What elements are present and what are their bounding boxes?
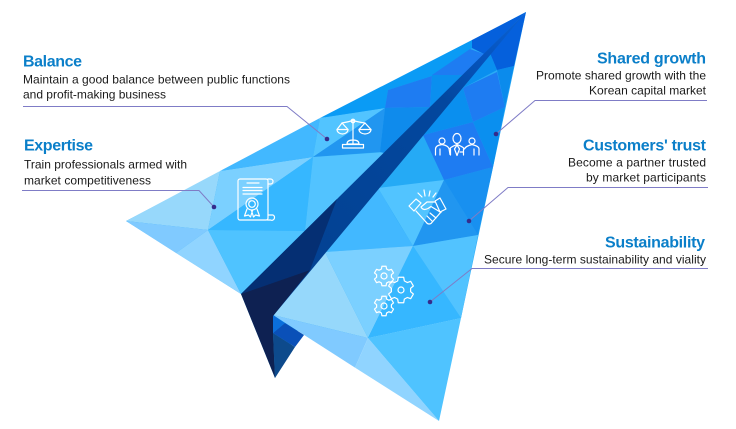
lower wing facets — [273, 235, 478, 421]
callout: Balance: Balance — [23, 53, 82, 70]
tail facets — [273, 315, 304, 378]
callout: Shared growth — [494, 50, 707, 136]
callout: Expertise: Train professionals armed with — [24, 157, 187, 171]
callout: Expertise — [22, 137, 216, 209]
icon: certificate scroll — [238, 179, 275, 220]
callout: Balance: and profit-making business — [23, 87, 166, 101]
callout: Balance: Maintain a good balance between public functions — [23, 72, 290, 86]
callout: Customers' trust: by market participants — [586, 170, 706, 184]
callout: Balance — [23, 53, 329, 141]
icon: gears — [371, 263, 418, 319]
callout: Shared growth: Shared growth — [597, 50, 706, 67]
icon: group of people — [436, 134, 479, 156]
callout: Sustainability: Sustainability — [605, 234, 705, 251]
callout: Sustainability: Secure long-term sustainability and viality — [484, 252, 706, 266]
callout: Shared growth: Promote shared growth with the — [536, 68, 706, 82]
upper left wing facets — [126, 12, 526, 294]
callout: Shared growth: Korean capital market — [589, 83, 707, 97]
callout: Expertise: Expertise — [24, 137, 93, 154]
paper plane — [126, 12, 526, 421]
icon: handshake — [409, 190, 446, 224]
callout: Customers' trust: Become a partner trusted — [568, 155, 706, 169]
icon: balance scale — [337, 119, 371, 148]
callout: Expertise: market competitiveness — [24, 173, 151, 187]
callout: Customers' trust — [467, 137, 708, 223]
central fold band — [241, 12, 526, 378]
callout: Customers' trust: Customers' trust — [583, 137, 707, 154]
right wing facets — [325, 12, 526, 252]
callout: Sustainability — [428, 234, 708, 304]
